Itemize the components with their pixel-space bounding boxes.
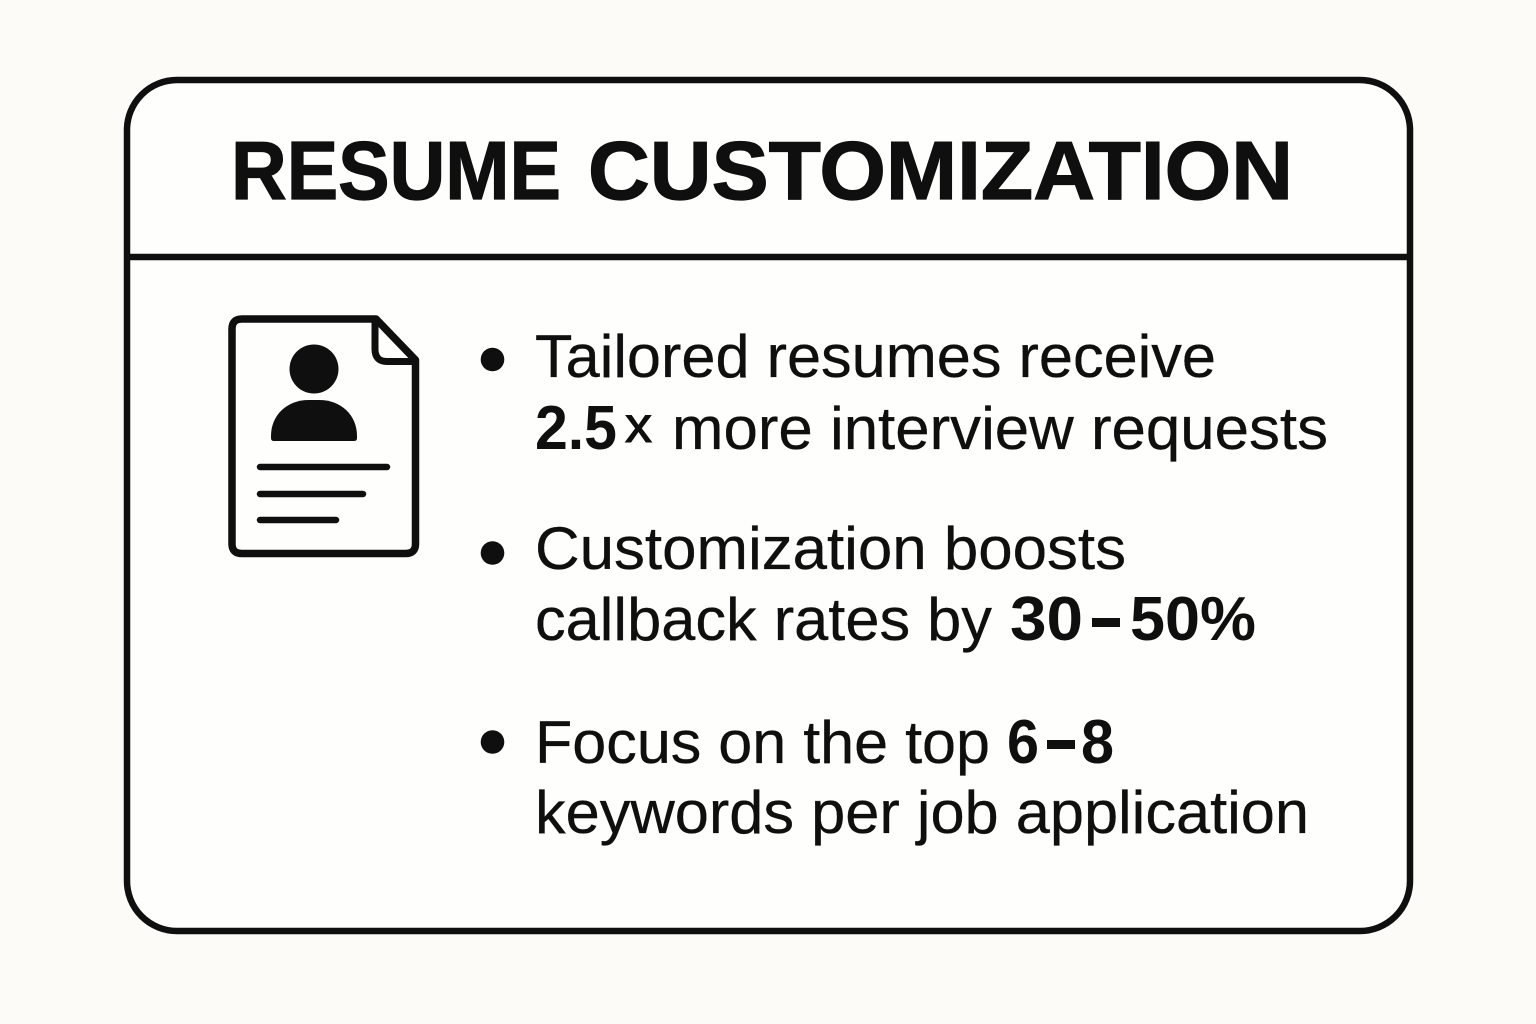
bullet item: keywords: keywords per job application: [535, 779, 1309, 846]
bullet item: callback rates: Customization boosts: [535, 515, 1126, 582]
bullet item: callback rates: [481, 515, 1256, 654]
bullet item: callback rates: 50%: [1130, 585, 1256, 654]
bullet item: keywords: 6: [1007, 708, 1039, 777]
bullet item: interview requests: x: [625, 397, 652, 453]
title: CUSTOMIZATION: [588, 125, 1293, 217]
panel: resume customization card: [127, 80, 1410, 931]
bullet item: keywords: Focus on the top: [535, 709, 990, 776]
title: RESUME: [231, 125, 561, 217]
bullet item: callback rates: callback rates by: [535, 586, 992, 653]
bullet item: interview requests: [481, 323, 1328, 463]
icon: resume document with person: [232, 319, 416, 554]
title: [231, 125, 1293, 217]
bullet item: interview requests: more interview requests: [672, 395, 1328, 462]
bullet item: interview requests: 2.5: [535, 394, 617, 463]
bullet item: callback rates: 30: [1010, 585, 1083, 654]
bullet item: interview requests: Tailored resumes receive: [535, 323, 1216, 390]
bullet item: keywords: [481, 708, 1309, 846]
bullet item: keywords: 8: [1081, 708, 1114, 777]
